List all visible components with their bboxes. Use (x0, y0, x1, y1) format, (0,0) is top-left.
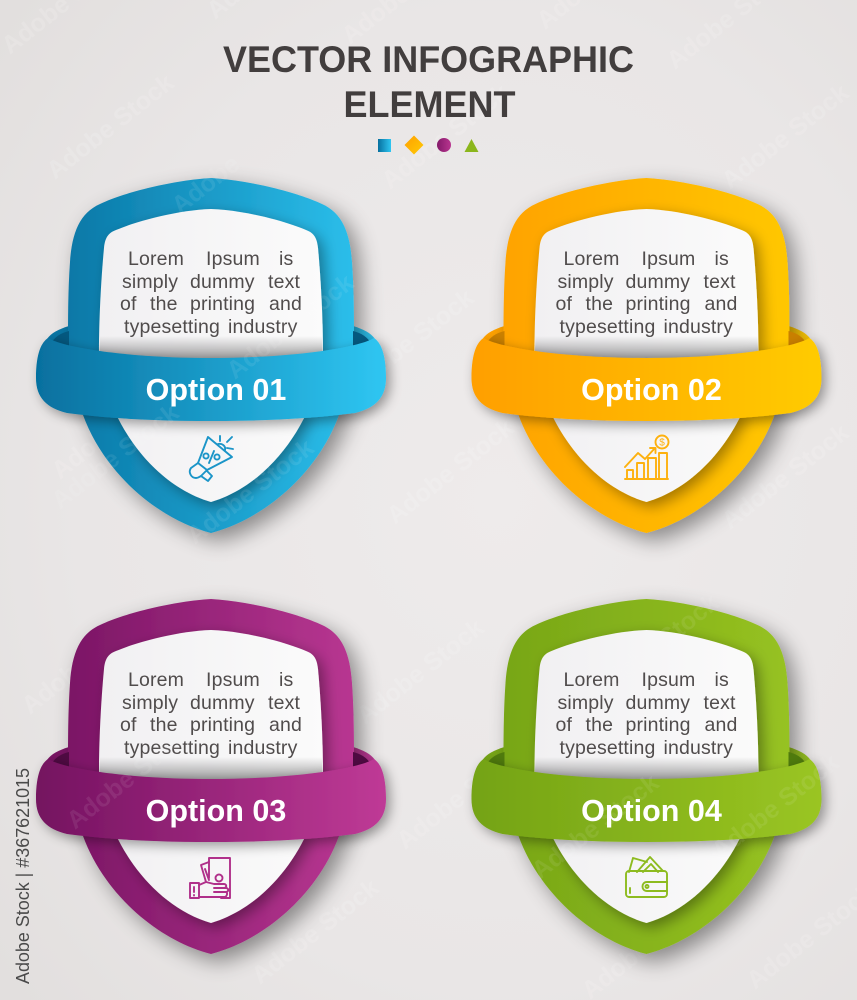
shield: blue (68, 178, 354, 533)
text block: industry (664, 316, 733, 338)
text block: and (269, 714, 302, 736)
text block: printing (190, 714, 255, 736)
text block: Ipsum (206, 248, 260, 270)
text block: text (268, 271, 300, 293)
text block: the (586, 293, 613, 315)
watermark pattern: Adobe Stock (16, 604, 154, 720)
band back: blue (51, 331, 371, 354)
shield: orange (504, 178, 790, 533)
text block: of (120, 714, 137, 736)
band back: orange (486, 331, 806, 354)
text block: Ipsum (642, 248, 695, 270)
watermark pattern: Adobe Stock (41, 69, 179, 185)
text block: typesetting (124, 316, 220, 338)
text block: and (704, 714, 738, 736)
text block: Ipsum (642, 669, 695, 691)
paper card (99, 630, 323, 923)
text block: printing (626, 714, 691, 736)
text block: dummy (190, 271, 255, 293)
shield: purple (68, 599, 354, 954)
text block: is (714, 248, 729, 270)
band rim: blue (44, 326, 378, 360)
band back: green (486, 752, 806, 775)
text block: text (268, 692, 300, 714)
shield: green (504, 599, 790, 954)
paper card (99, 209, 323, 502)
band front: orange (472, 338, 822, 421)
text block: and (269, 293, 302, 315)
watermark overlay: Adobe Stock (221, 269, 359, 385)
text block: dummy (190, 692, 255, 714)
watermark pattern: Adobe Stock (376, 79, 514, 195)
paper card (534, 209, 758, 502)
text block: simply (558, 271, 614, 293)
title (223, 39, 634, 125)
band front: green (472, 759, 822, 842)
watermark pattern: Adobe Stock (391, 739, 529, 855)
paper card (534, 630, 758, 923)
stock id caption: Adobe Stock | #367621015 (13, 768, 33, 984)
text block: of (556, 714, 572, 736)
label: Option 01 (146, 373, 286, 407)
text block: is (279, 669, 293, 691)
text block: simply (122, 271, 178, 293)
text block: and (704, 293, 738, 315)
icon: rising bar chart: $ (659, 438, 665, 448)
watermark overlay: Adobe Stock (526, 769, 664, 885)
text block: typesetting (560, 737, 655, 759)
watermark overlay: Adobe Stock (61, 719, 199, 835)
watermark overlay: Adobe Stock (586, 589, 724, 705)
watermark pattern: Adobe Stock (341, 284, 479, 400)
watermark pattern: Adobe Stock (716, 79, 854, 195)
label: Option 03 (146, 794, 286, 828)
watermark pattern: Adobe Stock (716, 419, 854, 535)
watermark pattern: Adobe Stock (381, 414, 519, 530)
watermark overlay: Adobe (166, 150, 245, 220)
icon: megaphone (190, 436, 233, 481)
text block: simply (558, 692, 614, 714)
text block: Lorem (564, 669, 620, 691)
title: VECTOR INFOGRAPHIC (223, 39, 634, 80)
text block: Lorem (564, 248, 620, 270)
text block: industry (228, 737, 298, 759)
band front: purple (36, 759, 386, 842)
text block: industry (228, 316, 298, 338)
icon: hand with cash (190, 858, 230, 898)
text block: is (714, 669, 729, 691)
panel: option 01 (36, 178, 386, 533)
band back: purple (51, 752, 371, 775)
watermark overlay: Adobe Stock (181, 434, 319, 550)
text block: the (586, 714, 613, 736)
watermark overlay: Adobe Stock (706, 749, 844, 865)
label: Option 02 (581, 373, 722, 407)
text block: text (704, 271, 736, 293)
text block: the (150, 293, 178, 315)
text block: is (279, 248, 293, 270)
text block: industry (664, 737, 733, 759)
band rim: green (480, 747, 814, 781)
band front: blue (36, 338, 386, 421)
text block: of (556, 293, 572, 315)
text block: dummy (626, 692, 690, 714)
band rim: purple (44, 747, 378, 781)
text block: Lorem (128, 669, 184, 691)
band rim: orange (480, 326, 814, 360)
watermark pattern: Adobe Stock (46, 369, 184, 485)
text block: Ipsum (206, 669, 260, 691)
panel: option 02 (472, 178, 822, 533)
text block: printing (190, 293, 255, 315)
title marker shapes (378, 136, 478, 154)
text block: text (704, 692, 736, 714)
panel: option 03 (36, 599, 386, 954)
watermark pattern: Adobe Stock (246, 874, 384, 990)
watermark pattern: Adobe Stock (351, 614, 489, 730)
text block: typesetting (560, 316, 655, 338)
label: Option 04 (581, 794, 722, 828)
text block: dummy (626, 271, 690, 293)
watermark overlay: Adobe Stock (46, 399, 184, 515)
panel: option 04 (472, 599, 822, 954)
text block: printing (626, 293, 691, 315)
text block: of (120, 293, 137, 315)
text block: Lorem (128, 248, 184, 270)
text block: the (150, 714, 178, 736)
icon: rising bar chart (625, 436, 668, 479)
icon: wallet (626, 857, 667, 897)
watermark overlay (46, 150, 844, 885)
text block: simply (122, 692, 178, 714)
text block: typesetting (124, 737, 220, 759)
title: ELEMENT (344, 84, 516, 125)
